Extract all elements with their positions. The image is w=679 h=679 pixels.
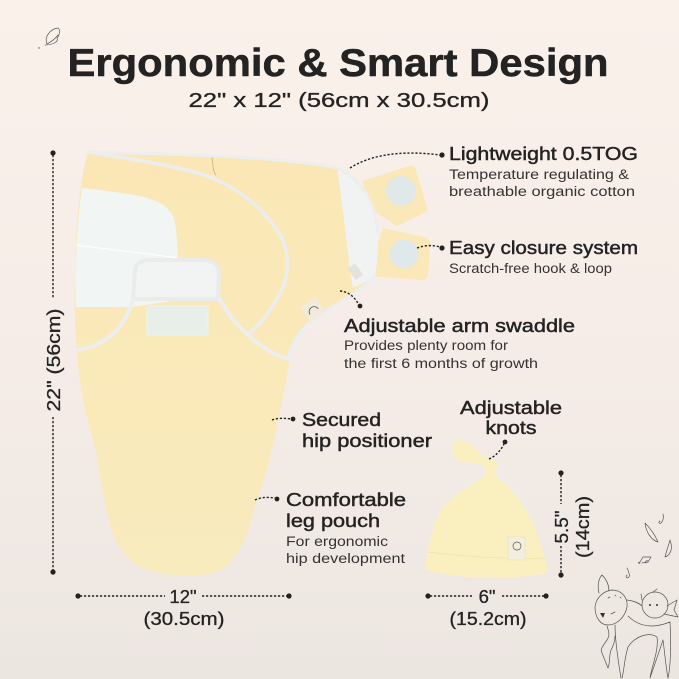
height dimension of swaddle: 22" (56cm) (43, 308, 64, 412)
swaddle blanket (75, 152, 430, 576)
illustration: deer, bird and music notes (595, 514, 678, 678)
callout: Lightweight 0.5TOG: breathable organic cotton (449, 184, 635, 199)
width dimension of hat: (15.2cm) (450, 608, 526, 629)
callout: Comfortable leg pouch (255, 489, 406, 566)
bird (642, 592, 668, 618)
callout: Adjustable knots (460, 397, 562, 459)
callout: Comfortable leg pouch: hip development (286, 551, 405, 566)
swaddle body (75, 152, 378, 576)
width dimension of swaddle: (30.5cm) (144, 608, 224, 629)
width dimension of hat (425, 586, 549, 629)
callout: Secured hip positioner (272, 409, 432, 451)
subtitle: overall size: 22" x 12" (56cm x 30.5cm) (188, 89, 490, 112)
callout: Lightweight 0.5TOG (350, 143, 638, 199)
height dimension of hat: 5.5" (551, 510, 572, 544)
arm opening binding (77, 276, 376, 359)
callout: Secured hip positioner: hip positioner (302, 430, 432, 451)
white lining: left (75, 188, 178, 307)
music notes and leaves (626, 523, 671, 578)
fastening tab: upper (362, 166, 427, 226)
callout: Adjustable arm swaddle: Adjustable arm swaddle (344, 315, 575, 336)
wrap fold edge (90, 152, 287, 335)
width dimension of swaddle (75, 586, 292, 629)
side tag (348, 263, 363, 280)
title: Ergonomic & Smart Design (68, 42, 608, 85)
callout: Easy closure system (417, 237, 638, 276)
callout: Secured hip positioner: Secured (302, 409, 381, 430)
icon: butterfly (38, 28, 60, 49)
woven label (300, 297, 326, 323)
callout: Adjustable arm swaddle: Provides plenty room for (344, 338, 509, 353)
callout: Easy closure system: Scratch-free hook & loop (449, 261, 612, 276)
width dimension of swaddle: 12" (170, 586, 196, 607)
callout: Adjustable arm swaddle: the first 6 months of growth (344, 356, 538, 371)
hat label (508, 537, 525, 560)
height dimension of hat (551, 470, 593, 578)
chest flap (133, 260, 219, 299)
callout: Comfortable leg pouch: Comfortable (286, 489, 406, 510)
callout: Lightweight 0.5TOG: Temperature regulating & (449, 167, 629, 182)
callout: Lightweight 0.5TOG: Lightweight 0.5TOG (449, 143, 638, 164)
fastening tab: lower (368, 228, 430, 280)
width dimension of hat: 6" (479, 586, 495, 607)
callout: Adjustable knots: knots (486, 417, 536, 438)
callout: Comfortable leg pouch: leg pouch (286, 510, 380, 531)
height dimension of swaddle (43, 150, 64, 575)
white lining: right wing (337, 170, 378, 288)
hat (425, 440, 548, 577)
callout: Comfortable leg pouch: For ergonomic (286, 534, 388, 549)
callout: Adjustable knots: Adjustable (460, 397, 562, 418)
callout: Adjustable arm swaddle (340, 291, 575, 371)
height dimension of hat: (14cm) (572, 496, 593, 558)
callout: Easy closure system: Easy closure system (449, 237, 638, 258)
deer (595, 575, 671, 678)
velcro strip (147, 306, 208, 335)
